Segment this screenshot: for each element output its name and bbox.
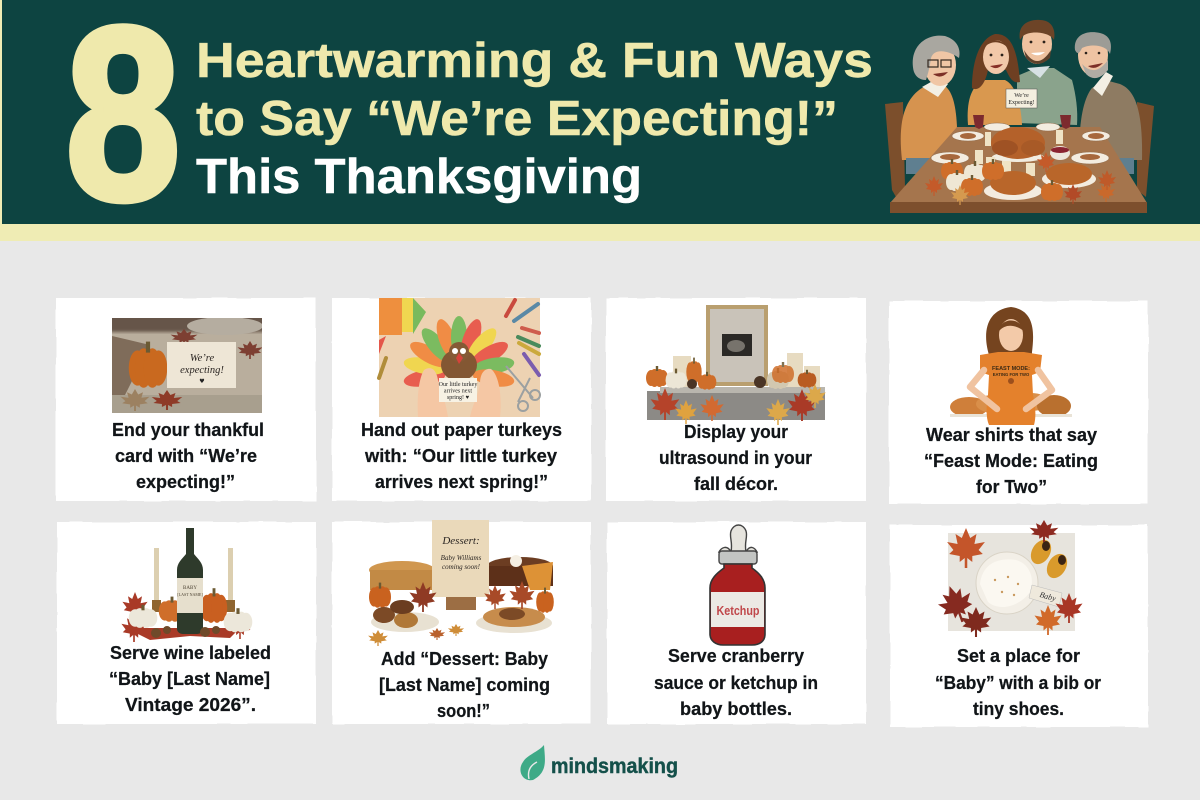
photo: pies and dessert sign: Baby Williams [441, 554, 482, 562]
icon: green leaf [520, 745, 545, 780]
title: This Thanksgiving [196, 150, 642, 204]
caption: ultrasound in your [659, 447, 812, 468]
daughter with card [968, 34, 1037, 125]
header banner [0, 0, 1200, 241]
turkey [991, 127, 1045, 162]
illustration: paper turkey craft: arrives next [444, 388, 472, 394]
photo: pies and dessert sign [368, 520, 554, 646]
photo: framed ultrasound on mantel [646, 305, 826, 425]
son with green sweater [1017, 20, 1077, 125]
caption: “Feast Mode: Eating [924, 450, 1098, 471]
caption: [Last Name] coming [379, 674, 550, 695]
caption: “Baby” with a bib or [935, 672, 1101, 693]
illustration: ketchup bottle [710, 525, 765, 645]
caption [924, 424, 1098, 497]
caption: for Two” [976, 476, 1047, 497]
illustration: ketchup bottle: Ketchup [716, 603, 760, 618]
card 6: dessert [332, 520, 591, 724]
caption [112, 419, 264, 492]
card 3: ultrasound decor [606, 298, 866, 501]
grandmother [901, 36, 960, 174]
caption: Display your [684, 421, 788, 442]
caption: arrives next spring!” [375, 471, 548, 492]
caption: Wear shirts that say [926, 424, 1098, 445]
photo: wine bottle with candles and pumpkins: [LAST NAME] [177, 592, 203, 597]
caption: tiny shoes. [973, 698, 1064, 719]
candles and wine [975, 130, 1063, 176]
illustration: woman in orange shirt with food [950, 307, 1072, 425]
caption [361, 419, 562, 492]
markers and scissors [379, 300, 539, 378]
illustration: woman in orange shirt with food: FEAST MODE: [992, 366, 1030, 372]
caption: sauce or ketchup in [654, 672, 818, 693]
illustration: woman in orange shirt with food: EATING FOR TWO [993, 372, 1030, 377]
card 1: thankful card [56, 298, 316, 501]
caption: End your thankful [112, 419, 264, 440]
caption: expecting!” [136, 471, 235, 492]
photo: pumpkin and place card [108, 314, 266, 413]
title [196, 34, 873, 204]
illustration: family at thanksgiving table [885, 20, 1154, 213]
caption: soon!” [437, 700, 490, 721]
logo: mindsmaking: mindsmaking [551, 754, 678, 778]
caption: Hand out paper turkeys [361, 419, 562, 440]
photo: plate, bib and tiny shoes: Baby [1039, 590, 1057, 603]
photo: pumpkin and place card: ♥ [199, 378, 205, 385]
plates [931, 123, 1110, 164]
caption: baby bottles. [680, 698, 792, 719]
caption: Set a place for [957, 645, 1080, 666]
daughter with card: Expecting! [1008, 100, 1035, 106]
caption: card with “We’re [115, 445, 257, 466]
daughter with card: We’re [1014, 93, 1029, 99]
caption [659, 421, 812, 494]
caption: Serve wine labeled [110, 642, 271, 663]
caption: fall décor. [694, 473, 778, 494]
caption [109, 642, 271, 715]
right chair [1137, 102, 1154, 197]
hands [418, 368, 501, 417]
caption: Vintage 2026”. [125, 694, 256, 715]
caption [379, 648, 550, 721]
logo: mindsmaking [520, 745, 678, 780]
card 5: wine [57, 522, 316, 724]
illustration: paper turkey craft [379, 298, 540, 417]
table [890, 127, 1147, 203]
photo: wine bottle with candles and pumpkins: BABY [183, 586, 197, 591]
card 7: ketchup baby bottle [607, 522, 866, 724]
photo: pumpkin and place card: expecting! [180, 365, 224, 376]
title: Heartwarming & Fun Ways [196, 34, 873, 88]
illustration: paper turkey craft: spring! ♥ [447, 395, 469, 401]
caption: “Baby [Last Name] [109, 668, 270, 689]
grandfather [1075, 32, 1142, 174]
caption [654, 645, 818, 719]
photo: pies and dessert sign: coming soon! [442, 563, 481, 571]
photo: pies and dessert sign: Dessert: [441, 535, 480, 547]
card 4: feast mode shirt [889, 301, 1148, 504]
photo: wine bottle with candles and pumpkins [121, 528, 252, 642]
left chair [885, 102, 905, 197]
caption: Add “Dessert: Baby [381, 648, 549, 669]
photo: plate, bib and tiny shoes [933, 520, 1082, 637]
pies and pumpkins [925, 152, 1116, 205]
card 8: place for baby [890, 520, 1148, 727]
caption: Serve cranberry [668, 645, 805, 666]
title: to Say “We’re Expecting!” [196, 92, 838, 146]
card 2: paper turkeys [332, 298, 591, 501]
photo: pumpkin and place card: We’re [190, 353, 214, 364]
illustration: paper turkey craft: Our little turkey [439, 382, 477, 388]
caption: with: “Our little turkey [364, 445, 558, 466]
caption [935, 645, 1101, 719]
